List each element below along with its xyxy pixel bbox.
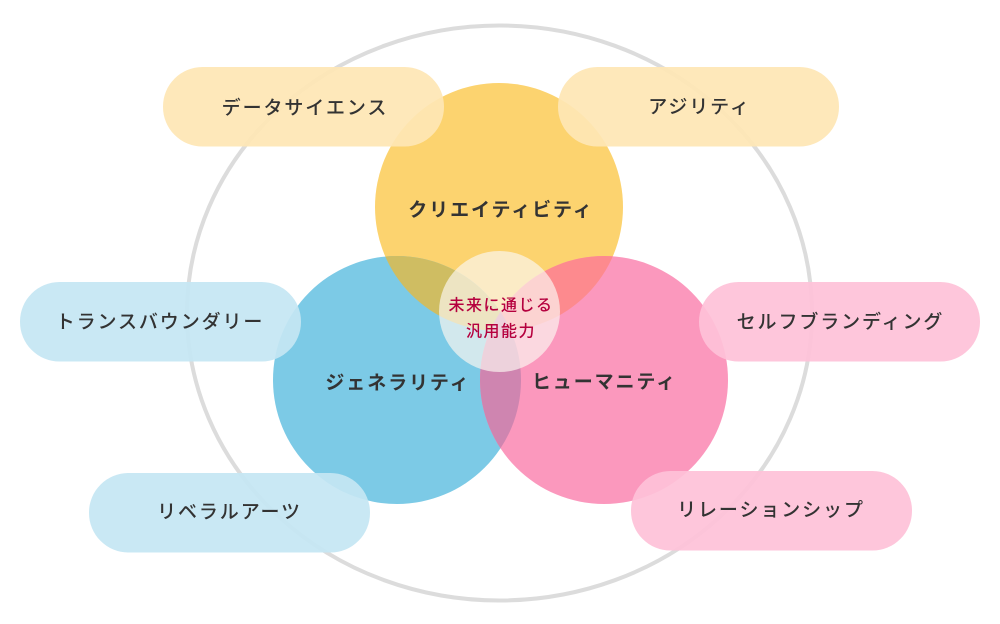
- pill: liberal arts: リベラルアーツ: [157, 502, 302, 523]
- pill: agility: アジリティ: [648, 97, 751, 118]
- pill: liberal arts: [89, 473, 370, 552]
- overlap: generality and humanity: [480, 312, 521, 448]
- pill: relationship: リレーションシップ: [677, 499, 865, 521]
- pill: self branding: セルフブランディング: [737, 310, 944, 333]
- center label: [448, 296, 554, 340]
- overlap: creativity and generality: [385, 256, 500, 331]
- pill: data science: [163, 67, 444, 146]
- center label: 未来に通じる: [448, 296, 554, 314]
- circle: creativity: [375, 83, 623, 331]
- circle: humanity: [480, 256, 728, 504]
- pill: transboundary: [20, 282, 301, 362]
- circle: generality: [273, 256, 521, 504]
- pill: transboundary: トランスバウンダリー: [56, 311, 264, 333]
- center circle: [439, 251, 560, 372]
- center label: 汎用能力: [466, 322, 536, 340]
- pill: data science: データサイエンス: [222, 96, 388, 119]
- pill: self branding: [699, 282, 980, 362]
- venn diagram circles: [273, 83, 728, 504]
- outer ring: [187, 26, 812, 600]
- pill: agility: [558, 67, 839, 146]
- label: humanity: ヒューマニティ: [532, 372, 677, 393]
- overlap: creativity and humanity: [500, 256, 613, 330]
- pill: relationship: [631, 471, 912, 550]
- label: creativity: クリエイティビティ: [408, 199, 594, 221]
- label: generality: ジェネラリティ: [325, 372, 471, 394]
